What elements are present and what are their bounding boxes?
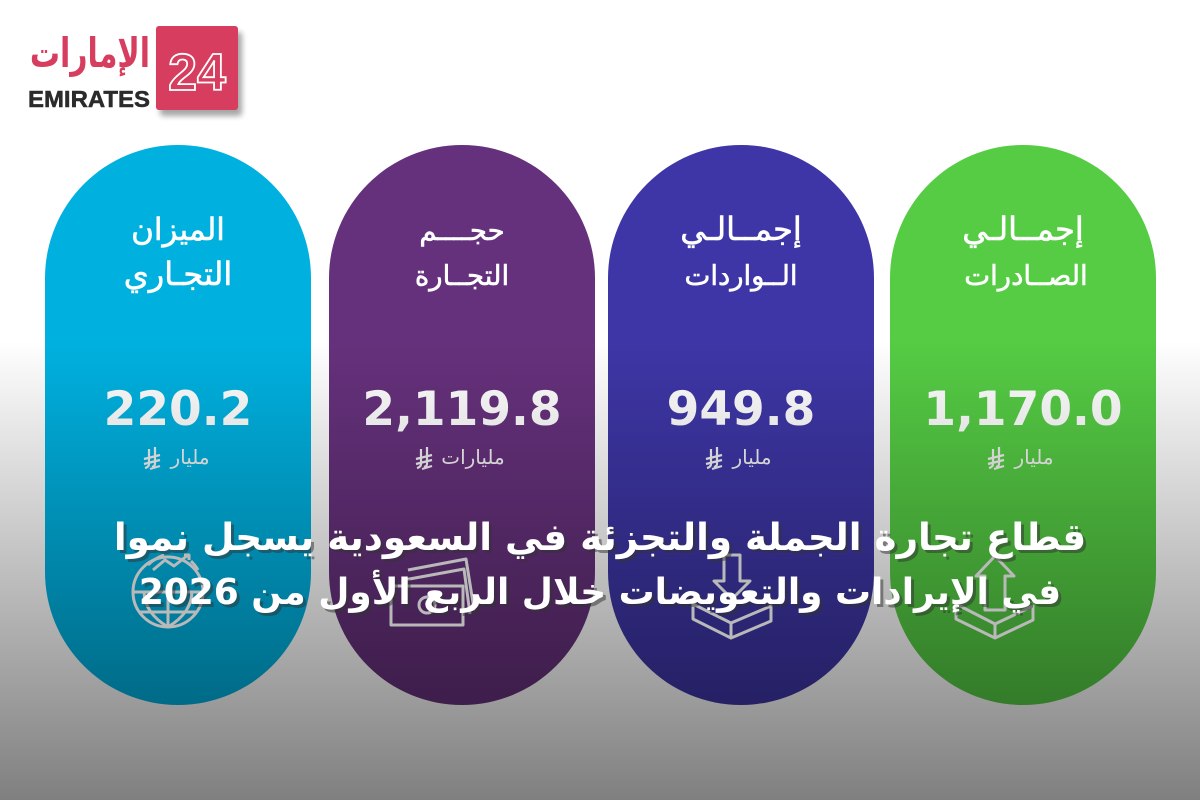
icon: globe with growth arrows: [133, 555, 203, 627]
heading: trade volume: [415, 215, 509, 292]
unit: billion riyal: مليار: [1013, 445, 1054, 469]
heading: trade volume: حجــــم: [419, 215, 505, 247]
pill: trade balance background: [45, 145, 311, 705]
icon: banknotes: [391, 559, 474, 625]
heading: trade balance: التجـاري: [124, 255, 232, 293]
panel: trade volume: [329, 145, 595, 705]
unit: billion riyal: مليار: [731, 445, 772, 469]
heading: total exports: [962, 210, 1088, 292]
title shadow: قطاع تجارة الجملة والتجزئة في السعودية يسجل نموا: [117, 518, 1089, 562]
panel: trade balance: [45, 145, 311, 705]
unit: billion riyal: [706, 445, 772, 469]
heading: total exports: إجمــالـي: [962, 210, 1084, 248]
pill: total exports background: [890, 145, 1156, 705]
panel: total imports: [608, 145, 874, 705]
title shadow: [117, 518, 1089, 616]
value: 1,170.0: 1,170.0: [923, 382, 1123, 437]
dark gradient overlay: [0, 340, 1200, 800]
heading: total imports: الــواردات: [684, 260, 798, 292]
icon: box with down arrow: [693, 555, 771, 638]
pill: total imports background: [608, 145, 874, 705]
logo shadow: [160, 32, 242, 116]
value: 2,119.8: 2,119.8: [362, 382, 562, 437]
logo: Arabic wordmark: الإمارات: [30, 31, 150, 77]
heading: trade volume: التجــارة: [415, 260, 509, 292]
title: [114, 515, 1089, 616]
pill: trade volume background: [329, 145, 595, 705]
unit: billion riyals: مليارات: [441, 445, 505, 469]
title line 2: في الإيرادات والتعويضات خلال الربع الأول من 2026: [139, 569, 1061, 613]
heading: trade balance: الميزان: [131, 212, 225, 248]
icon: box with up arrow: [956, 556, 1033, 638]
logo: red square: [156, 26, 238, 110]
heading: total imports: إجمــالـي: [680, 210, 802, 248]
logo: 24 numerals: 24: [168, 44, 226, 102]
heading: trade balance: [124, 212, 232, 293]
title shadow: في الإيرادات والتعويضات خلال الربع الأول من 2026: [142, 572, 1064, 616]
title line 1: قطاع تجارة الجملة والتجزئة في السعودية يسجل نموا: [114, 515, 1086, 559]
heading: total exports: الصــادرات: [964, 260, 1088, 292]
unit: billion riyal: [144, 445, 210, 469]
value: 949.8: 949.8: [667, 382, 815, 437]
value: 220.2: 220.2: [104, 382, 252, 437]
unit: billion riyal: [988, 445, 1054, 469]
logo: EMIRATES wordmark: EMIRATES: [28, 86, 150, 112]
heading: total imports: [680, 210, 802, 292]
panel: total exports: [890, 145, 1156, 705]
unit: billion riyal: مليار: [169, 445, 210, 469]
logo: Emirates 24: [28, 26, 242, 116]
